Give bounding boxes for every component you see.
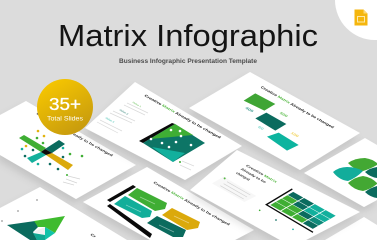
legend dots [259,209,294,230]
value label 3: Value 3 [104,116,116,124]
badge: 35+ Total Slides [37,79,93,135]
slide: top right matrix blocks [189,72,360,170]
green chevron [128,188,167,211]
scatter dots [21,130,83,176]
teal chevron [114,196,152,218]
petal: dark teal right [365,167,377,178]
slide: grid matrix [190,150,360,240]
dark teal block [255,113,286,131]
black bar top [107,185,136,202]
slide: chevron matrix [83,167,254,240]
matrix cross chart [19,135,73,170]
chevron labels [126,197,189,232]
pyramid chart [7,216,65,240]
value label 2: Value 2 [118,108,130,116]
matrix grid [270,192,336,229]
value label 1: Value 1 [131,101,143,108]
slide: right petals [304,138,377,207]
title: Matrix Infographic [58,19,318,53]
petal: dark teal lower right [365,186,377,198]
green block [244,93,275,111]
slide heading: Creative Matrix Already to be changed [35,112,114,157]
value text lines [97,103,148,133]
value 60: 60 [257,125,265,131]
slide heading: Creative Matrix Already to be changed [143,94,222,139]
matrix chart [139,123,205,162]
value 500: 500 [279,111,289,118]
teal block [267,133,299,151]
slide heading: Creative Matrix Already to be changed [260,85,335,129]
slide heading: Cr [89,233,97,238]
note card [212,177,256,202]
gold chevron [162,208,200,230]
icon: Google Slides badge [335,0,377,40]
petal: green top [348,158,377,171]
dark teal chevron [147,216,186,237]
chart legend [179,161,194,170]
slide: cross matrix [0,101,136,199]
slide: bottom right corner [325,217,377,240]
slide heading: Creative Matrix Already to be changed [152,181,231,226]
petal: teal left [333,167,363,181]
slide: diagonal matrix [85,82,242,180]
slide heading line 3: changed [235,171,251,182]
matrix frame [266,189,313,232]
black bar bottom [107,204,152,238]
small markers [1,199,38,222]
value 400: 400 [244,106,255,113]
subtitle: Business Infographic Presentation Template [119,58,258,65]
petal: green bottom [348,176,377,191]
badge number: 35+ [49,94,81,114]
slide heading line 2: Already to be [240,167,268,184]
slide heading: Creative Matrix [245,164,279,184]
badge caption: Total Slides [47,116,84,122]
value 100: 100 [290,131,300,138]
legend lines [63,176,80,185]
slide: pyramid bottom left [0,187,127,240]
